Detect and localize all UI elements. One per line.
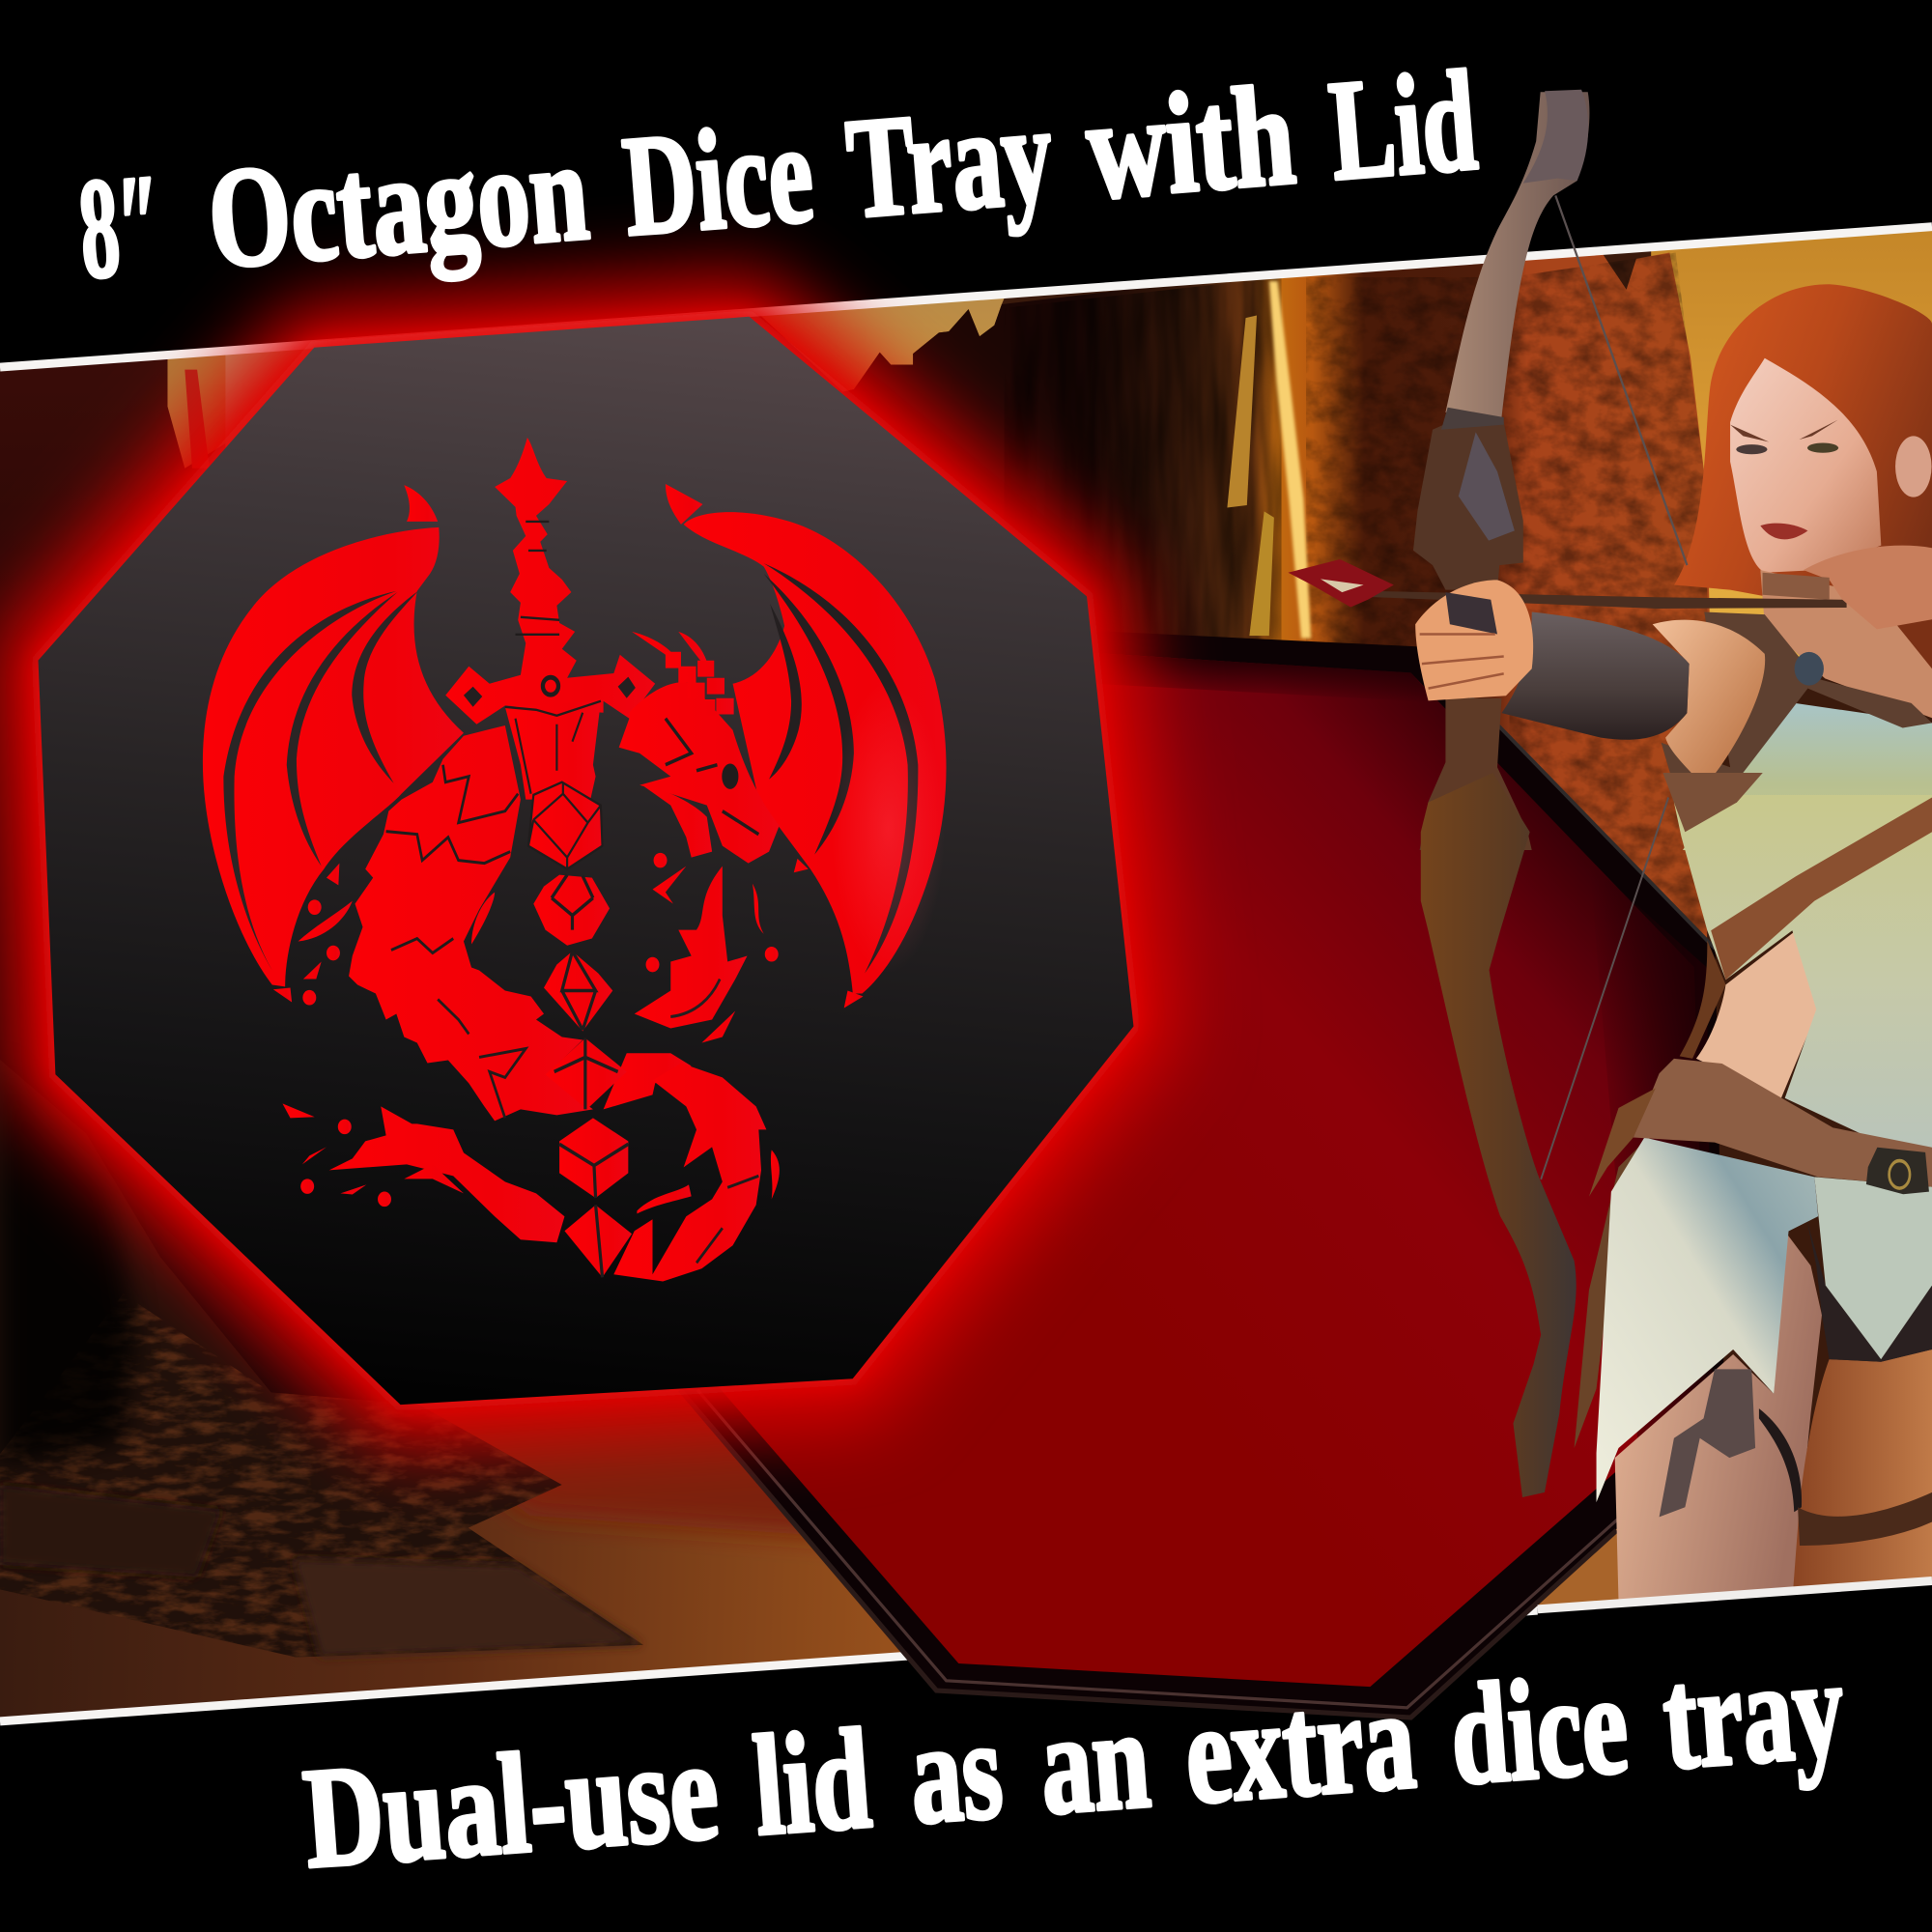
background scene xyxy=(0,222,1932,1737)
left thigh xyxy=(1615,1231,1822,1601)
face xyxy=(1730,358,1881,573)
bottom title: an xyxy=(1035,1679,1154,1845)
dragon body xyxy=(298,725,766,1281)
ear xyxy=(1895,436,1932,497)
d12 die xyxy=(533,875,610,946)
archer lower body xyxy=(1421,773,1932,1601)
bottom title: lid xyxy=(749,1699,875,1866)
octagon dice tray xyxy=(39,317,1133,1405)
chest and neck xyxy=(1760,570,1932,718)
red glow around tray xyxy=(39,317,1133,1405)
thigh holster xyxy=(1660,1369,1755,1517)
bowstring xyxy=(1555,195,1687,565)
dragon emblem xyxy=(203,438,947,1281)
skirt xyxy=(1597,1138,1818,1502)
brown back drape xyxy=(1680,940,1725,1059)
bottom title: tray xyxy=(1658,1629,1849,1800)
brown cloth xyxy=(1575,1138,1648,1448)
dragon head xyxy=(619,632,780,864)
bottom title: dice xyxy=(1445,1644,1633,1815)
right thigh xyxy=(1792,1350,1932,1601)
bottom title xyxy=(298,1629,1849,1898)
arm guard xyxy=(1501,612,1690,740)
draw hand xyxy=(1804,546,1932,629)
bodice xyxy=(1683,703,1932,850)
upper bow limb xyxy=(1445,90,1589,417)
right wing xyxy=(666,484,947,1008)
top title: Dice xyxy=(618,94,818,267)
d6 die xyxy=(559,1118,628,1198)
left wing xyxy=(203,485,464,1002)
top title: 8″ xyxy=(73,145,167,309)
d4 die xyxy=(564,1205,632,1277)
waist skin xyxy=(1696,930,1818,1098)
leather harness xyxy=(1662,612,1932,802)
bow string lower xyxy=(1541,798,1668,1179)
thin thigh strap xyxy=(1759,1408,1802,1512)
hair xyxy=(1674,284,1932,694)
belt xyxy=(1589,1059,1932,1197)
dark shorts xyxy=(1807,1221,1932,1362)
bottom title: as xyxy=(905,1690,1008,1855)
top title xyxy=(73,42,1482,309)
d8 die xyxy=(544,952,612,1031)
bottom title: extra xyxy=(1180,1660,1420,1834)
top title: Tray xyxy=(841,74,1058,249)
arrow xyxy=(1288,559,1847,609)
bottom title: Dual-use xyxy=(298,1711,724,1898)
shoulder arm xyxy=(1653,620,1765,787)
band border lines xyxy=(0,227,1932,1721)
front panel xyxy=(1814,1177,1932,1359)
shoulder strap bottom xyxy=(1662,773,1763,832)
lid: red inside of the second tray xyxy=(680,631,1725,1718)
diagonal strap xyxy=(1711,798,1932,980)
string collar xyxy=(1763,573,1830,600)
sword xyxy=(445,438,655,800)
d20 die xyxy=(528,782,603,869)
top title: Lid xyxy=(1324,42,1482,211)
top title: with xyxy=(1081,56,1300,230)
grip hand xyxy=(1415,580,1533,700)
dragon tail flame xyxy=(282,1103,780,1242)
d10 die xyxy=(546,1038,627,1109)
bottom band right cover xyxy=(1538,1579,1932,1932)
top title: Octagon xyxy=(203,111,593,299)
bow grip xyxy=(1413,408,1532,850)
bodice lower xyxy=(1674,795,1932,1167)
eyes and mouth xyxy=(1730,420,1838,539)
archer upper body xyxy=(1288,90,1932,850)
thigh band xyxy=(1798,1492,1932,1546)
bow lower limb xyxy=(1421,773,1577,1497)
dragon fire breath xyxy=(635,853,779,1042)
